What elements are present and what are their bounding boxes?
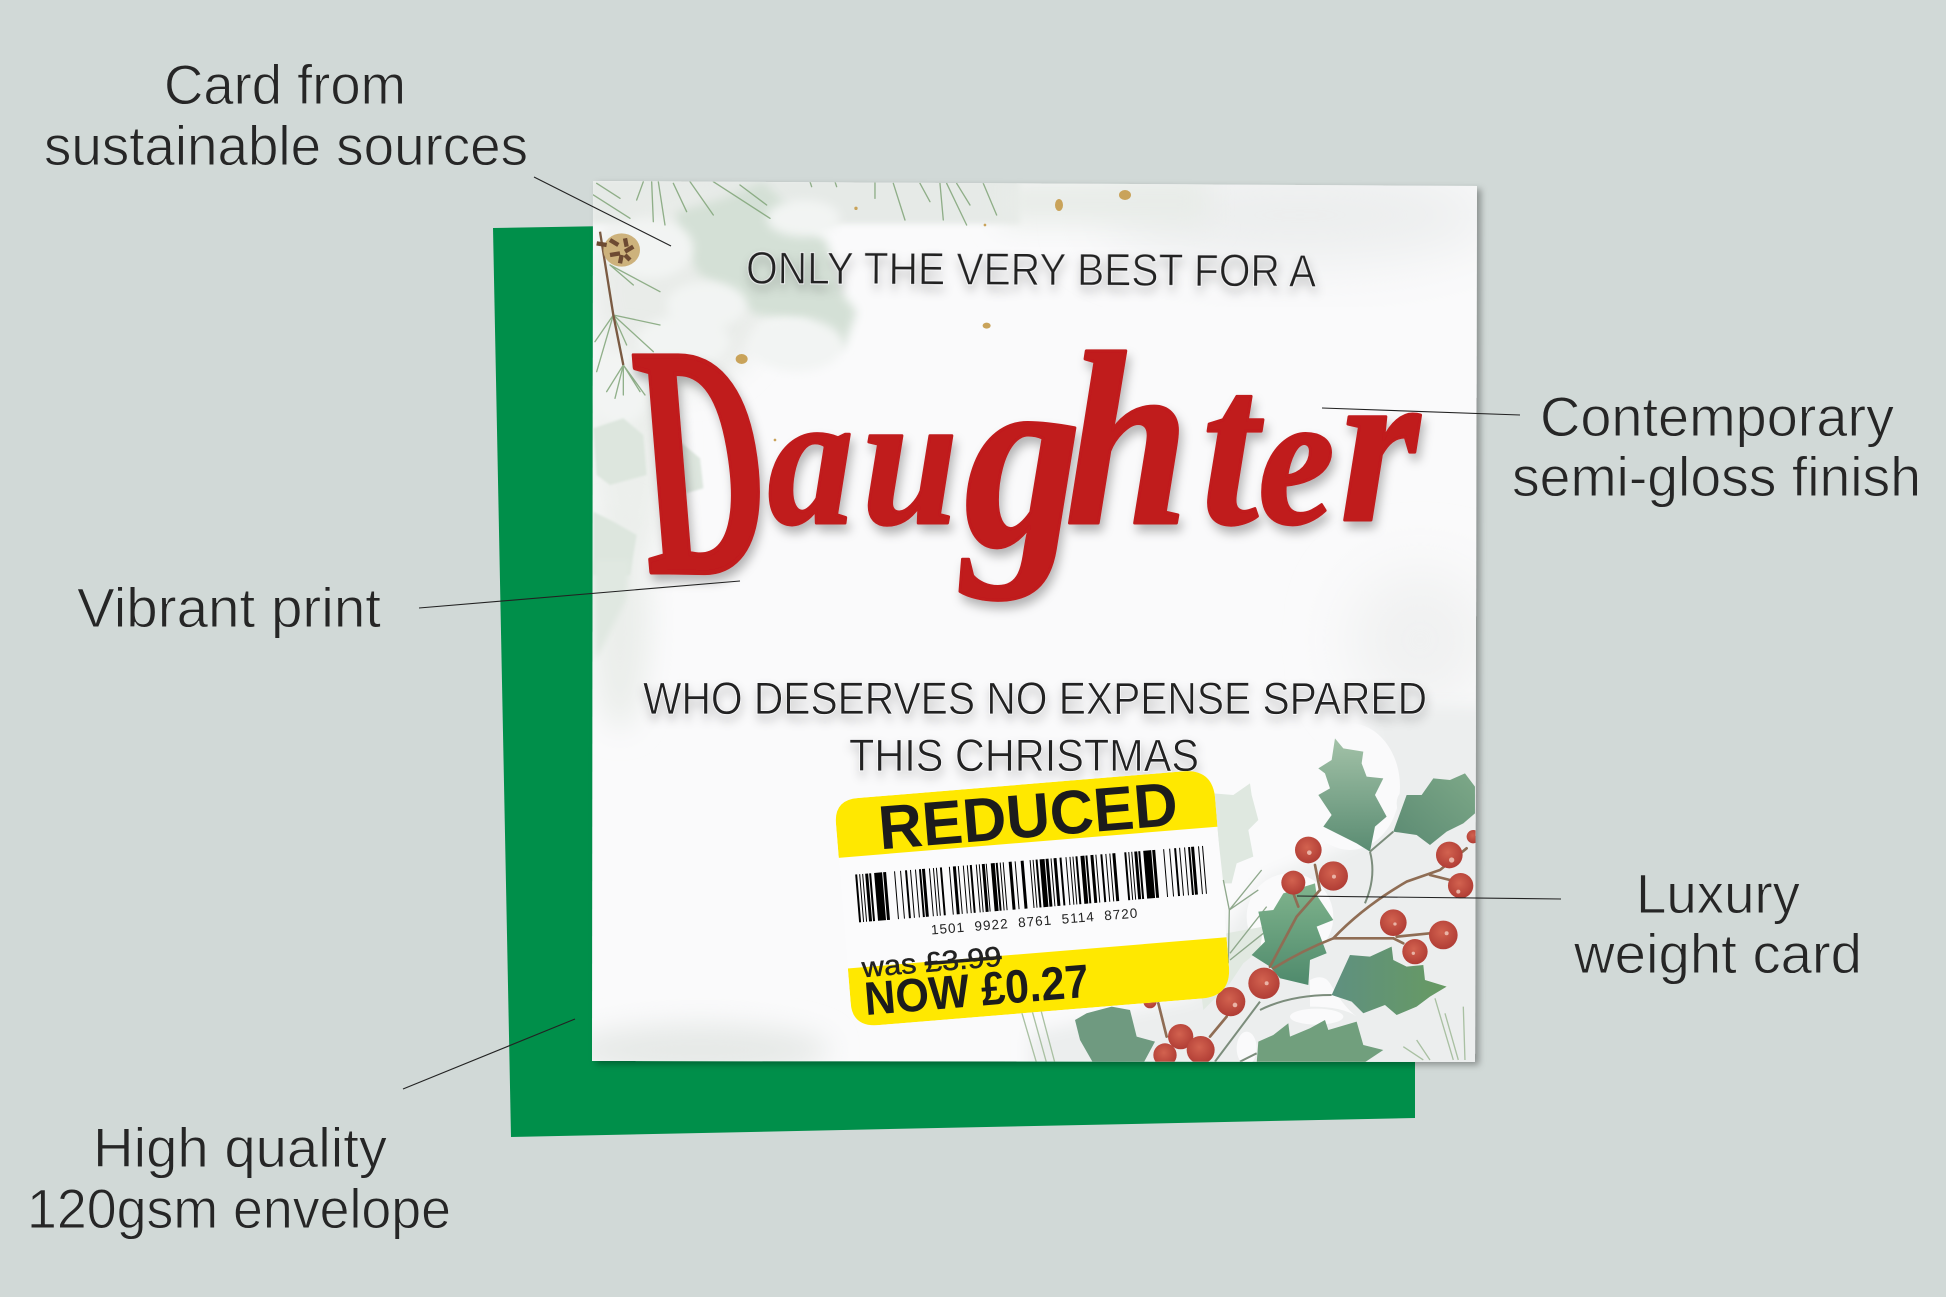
Daughter script word: e	[1259, 355, 1334, 565]
gold flecks	[715, 207, 991, 441]
holly group	[1021, 710, 1476, 1062]
Daughter script word: g	[959, 314, 1081, 602]
holly leaf middle	[1252, 883, 1333, 985]
callout: luxury weight card: Luxury	[1636, 862, 1800, 925]
pale leaf lower left	[594, 575, 627, 652]
card base	[592, 181, 1477, 1062]
card artwork	[570, 169, 1500, 1080]
callout line: luxury weight card	[1297, 896, 1561, 899]
pine needles	[593, 182, 997, 398]
Daughter script word: a	[768, 355, 854, 565]
callout: sustainable sources: Card from	[164, 53, 406, 116]
Daughter script word: r	[1340, 320, 1421, 569]
old price: was £3.99	[859, 941, 1003, 983]
callout line: envelope	[403, 1019, 575, 1089]
callout: luxury weight card	[1573, 862, 1862, 985]
watercolour washes	[570, 169, 1500, 1076]
callout: semi-gloss finish	[1512, 385, 1921, 508]
barcode digits: 1501 9922 8761 5114 8720	[930, 906, 1138, 937]
holly leaf bottom centre	[1257, 1020, 1383, 1063]
Daughter script word	[598, 279, 1421, 645]
Daughter script word: u	[863, 355, 958, 565]
callout: vibrant print: Vibrant print	[77, 576, 381, 639]
pale leaves along left edge	[593, 418, 703, 575]
greeting card	[570, 169, 1500, 1080]
Daughter script word: t	[1202, 323, 1263, 572]
Daughter script word: D	[598, 279, 793, 645]
Daughter script word: h	[1065, 303, 1189, 578]
callout: semi-gloss finish: semi-gloss finish	[1512, 445, 1921, 508]
pale lower leaf	[1202, 927, 1263, 1010]
callout: luxury weight card: weight card	[1573, 922, 1862, 985]
bottom pine needles	[1020, 998, 1465, 1063]
gold flecks top	[1055, 190, 1131, 211]
callout: semi-gloss finish: Contemporary	[1540, 385, 1894, 448]
branches	[1158, 848, 1467, 1037]
grey-green leaf wash top left	[677, 182, 857, 348]
holly leaf right	[1393, 773, 1475, 845]
green stems	[1215, 832, 1393, 1062]
green envelope	[493, 226, 1415, 1137]
white halos	[1236, 730, 1400, 1062]
small pine sprig	[1223, 870, 1267, 963]
yellow top band	[836, 771, 1218, 858]
holly leaf lower right	[1332, 947, 1447, 1015]
textured paper behind holly	[1032, 710, 1476, 1062]
yellow bottom band	[848, 937, 1230, 1026]
callout: envelope	[27, 1116, 451, 1240]
card heading top: ONLY THE VERY BEST FOR A	[746, 243, 1316, 296]
holly leaf bottom left	[1075, 1007, 1155, 1063]
callout: envelope: 120gsm envelope	[27, 1177, 451, 1240]
callout: sustainable sources: sustainable sources	[44, 114, 528, 177]
callout line: vibrant print	[419, 581, 740, 608]
new price: NOW £0.27	[862, 954, 1091, 1025]
callout line: sustainable sources	[534, 177, 671, 246]
pale holly leaf	[1213, 783, 1258, 883]
card message line one: WHO DESERVES NO EXPENSE SPARED	[643, 673, 1427, 724]
pine cone	[597, 233, 640, 267]
barcode	[857, 870, 1205, 898]
callout: envelope: High quality	[93, 1116, 387, 1179]
sticker title: REDUCED	[876, 770, 1180, 863]
card message line two: THIS CHRISTMAS	[849, 730, 1199, 781]
sticker shape	[836, 771, 1230, 1026]
reduced sticker	[836, 771, 1230, 1026]
holly leaf top	[1318, 738, 1387, 852]
callout line: semi-gloss finish	[1322, 408, 1520, 415]
berries	[1143, 830, 1480, 1067]
pine branch	[600, 232, 623, 365]
berry highlights	[1233, 850, 1460, 1007]
callout: sustainable sources	[44, 53, 528, 177]
white scallops over wash	[590, 200, 843, 425]
